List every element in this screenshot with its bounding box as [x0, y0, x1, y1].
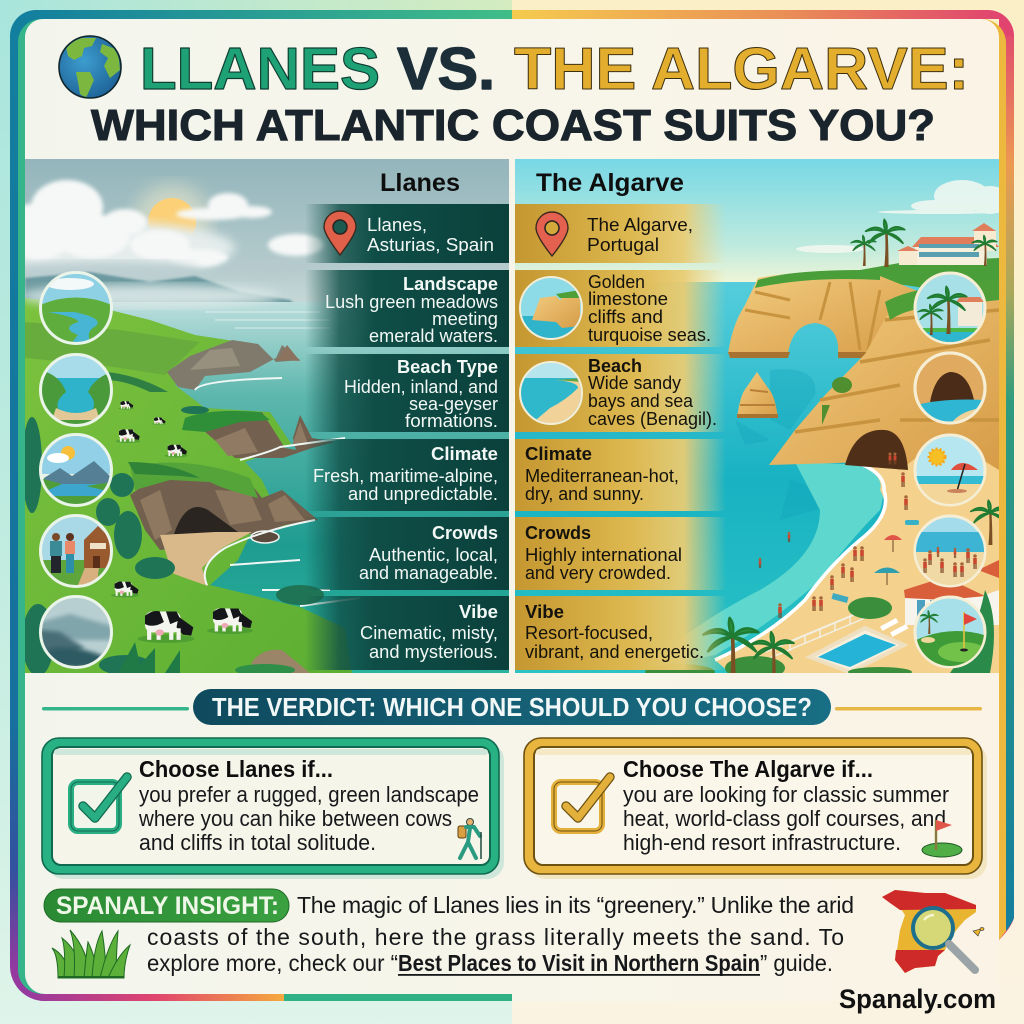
row: climate: dry, and sunny.: [525, 484, 644, 504]
tree line on meadow: [105, 372, 168, 392]
fence: [765, 608, 870, 660]
beach umbrellas and people: [759, 453, 919, 618]
sky: [25, 159, 509, 302]
insight badge: SPANALY INSIGHT:: [56, 892, 279, 920]
house: [904, 560, 999, 625]
insight text: explore more, check our “: [147, 950, 398, 976]
row: vibe: and mysterious.: [369, 642, 498, 662]
panel: Llanes scene: [0, 159, 510, 677]
row: beach: caves (Benagil).: [588, 409, 717, 429]
surf lines: [195, 378, 360, 606]
row: beach type: Hidden, inland, and: [344, 377, 498, 397]
beach: [715, 458, 999, 673]
panel: Llanes table rows: [305, 204, 509, 670]
icon: green check box: [71, 777, 127, 831]
circle: sea cave: [915, 353, 985, 425]
surf line: [715, 462, 886, 660]
circle: misty hills: [40, 596, 112, 668]
row: climate: Mediterranean-hot,: [525, 466, 679, 486]
row: location: Asturias, Spain: [367, 235, 494, 255]
row: vibe: [305, 596, 509, 670]
panel: Algarve scene: [515, 159, 1010, 685]
row: location: [515, 204, 726, 263]
row: crowds: [305, 517, 509, 590]
row: beach: [515, 354, 726, 432]
title line 2: WHICH ATLANTIC COAST SUITS YOU?: [91, 101, 935, 150]
circle: limestone cliffs: [520, 277, 582, 340]
title line 1: THE ALGARVE:: [514, 36, 969, 102]
icon: golf flag: [922, 820, 962, 857]
rocks and ferns foreground: [250, 650, 310, 673]
clouds: [796, 180, 1010, 253]
title line 1: VS.: [397, 36, 495, 102]
clouds: [25, 177, 326, 271]
row: beach type: formations.: [405, 411, 498, 431]
far headland rocks: [167, 340, 300, 390]
row: beach: bays and sea: [588, 391, 694, 411]
right bottom paper tone: [512, 1001, 1024, 1024]
row: vibe: vibrant, and energetic.: [525, 642, 704, 662]
row: beach type: sea-geyser: [409, 394, 498, 414]
row: crowds: Crowds: [525, 523, 591, 543]
verdict banner: THE VERDICT: WHICH ONE SHOULD YOU CHOOSE?: [212, 694, 812, 722]
row: landscape: Landscape: [403, 274, 498, 294]
sun loungers: [880, 618, 908, 637]
circle: palms and hotel: [915, 273, 985, 343]
palm trees on cliff: [851, 219, 997, 267]
circle: sun and umbrella: [915, 435, 985, 506]
swimming pool: [810, 628, 904, 672]
dark trees: [22, 406, 324, 676]
circle: meadow river: [40, 272, 112, 345]
row: climate: [305, 439, 509, 511]
distant mountains: [25, 270, 294, 302]
row: landscape: turquoise seas.: [588, 325, 711, 345]
sun: [131, 176, 216, 233]
card: choose Llanes: you prefer a rugged, green landscape: [139, 782, 479, 807]
foreground palms: [703, 500, 1008, 685]
sea: [515, 282, 920, 673]
row: landscape: Lush green meadows: [325, 292, 498, 312]
row: climate: [515, 439, 726, 511]
left scene circles: [40, 272, 112, 668]
insight text: [147, 892, 854, 976]
headland with resort: [776, 258, 999, 288]
title line 1: LLANES: [140, 36, 380, 102]
darker water patches: [736, 370, 816, 426]
card: choose The Algarve: high-end resort infrastructure.: [623, 830, 901, 855]
icon: gold check box: [554, 777, 610, 831]
row: location: The Algarve,: [587, 215, 693, 235]
row: landscape: [305, 270, 509, 347]
circle: couple and house: [40, 515, 112, 590]
row: vibe: Vibe: [459, 602, 498, 622]
circle: sandy bay: [520, 362, 590, 425]
green slopes: [25, 298, 352, 673]
row: landscape: [515, 270, 726, 347]
card: choose Llanes: where you can hike between cows: [138, 806, 452, 831]
insight text: The magic of Llanes lies in its “greenery.” Unlike the arid: [297, 892, 854, 918]
row: vibe: [515, 596, 726, 670]
circle: golf green: [915, 597, 986, 668]
row: vibe: Cinematic, misty,: [360, 623, 498, 643]
row: crowds: and manageable.: [359, 563, 498, 583]
panel: Algarve table rows: [515, 204, 726, 670]
row: landscape: Golden: [588, 272, 645, 292]
heading: The Algarve: The Algarve: [536, 169, 684, 197]
row: landscape: cliffs and: [588, 307, 663, 327]
resort building: [897, 223, 999, 265]
circle: cove: [40, 354, 112, 428]
divider rules beside verdict: [42, 707, 982, 710]
mist over upper hill: [20, 284, 280, 308]
insight text: Best Places to Visit in Northern Spain: [398, 950, 760, 976]
row: beach: Beach: [588, 356, 642, 376]
insight text: coasts of the south, here the grass literally meets the sand. To: [147, 924, 844, 950]
sea stack: [737, 372, 778, 418]
icon: grass tuft: [52, 930, 130, 978]
card: choose The Algarve: you are looking for classic summer: [623, 782, 949, 807]
row: crowds: Highly international: [525, 545, 682, 565]
row: location: Portugal: [587, 235, 659, 255]
icon: hiker: [458, 818, 481, 859]
brand name: Spanaly.com: [839, 984, 996, 1014]
sea: [100, 302, 510, 677]
row: crowds: and very crowded.: [525, 563, 671, 583]
row: climate: Climate: [525, 444, 592, 464]
row: climate: Fresh, maritime-alpine,: [313, 466, 498, 486]
row: landscape: emerald waters.: [369, 326, 498, 346]
row: beach type: [305, 354, 509, 432]
heading: Llanes: Llanes: [380, 169, 460, 197]
big golden cliff: [769, 280, 999, 470]
row: vibe: Vibe: [525, 602, 564, 622]
rock in the surf: [251, 531, 279, 543]
card: choose The Algarve: [524, 738, 987, 879]
row: climate: Climate: [431, 444, 498, 464]
card: choose Llanes: [42, 738, 504, 879]
row: crowds: Authentic, local,: [369, 545, 498, 565]
circle: mountains: [40, 434, 112, 506]
circle: crowded beach: [915, 516, 985, 588]
icon: map pin: [536, 212, 568, 256]
darker upper meadow: [25, 322, 200, 375]
icon: map pin: [324, 211, 356, 255]
card: choose The Algarve: heat, world-class golf courses, and: [623, 806, 946, 831]
shallow water: [688, 463, 883, 660]
row: beach: Wide sandy: [588, 373, 681, 393]
small beach: [160, 532, 252, 586]
title line 1: [140, 36, 969, 102]
sky: [515, 159, 999, 284]
card: choose Llanes: and cliffs in total solitude.: [139, 830, 376, 855]
row: beach type: Beach Type: [397, 357, 498, 377]
insight text: ” guide.: [760, 950, 833, 976]
mid cliffs: [182, 411, 335, 458]
card: choose The Algarve: Choose The Algarve if...: [623, 756, 873, 782]
icon: Spain map with magnifier: [882, 890, 984, 973]
row: vibe: Resort-focused,: [525, 623, 653, 643]
row: location: [305, 204, 509, 263]
icon: globe: [59, 36, 121, 98]
card: choose Llanes: Choose Llanes if...: [139, 756, 333, 782]
row: crowds: [515, 517, 726, 590]
big cave cliff: [128, 462, 318, 550]
row: crowds: Crowds: [432, 523, 498, 543]
row: climate: and unpredictable.: [348, 484, 498, 504]
row: location: Llanes,: [367, 215, 427, 235]
row: landscape: meeting: [432, 309, 498, 329]
limestone arch: [728, 271, 920, 358]
foreground foliage: [645, 590, 994, 680]
row: landscape: limestone: [588, 289, 668, 309]
cows: [111, 401, 253, 643]
